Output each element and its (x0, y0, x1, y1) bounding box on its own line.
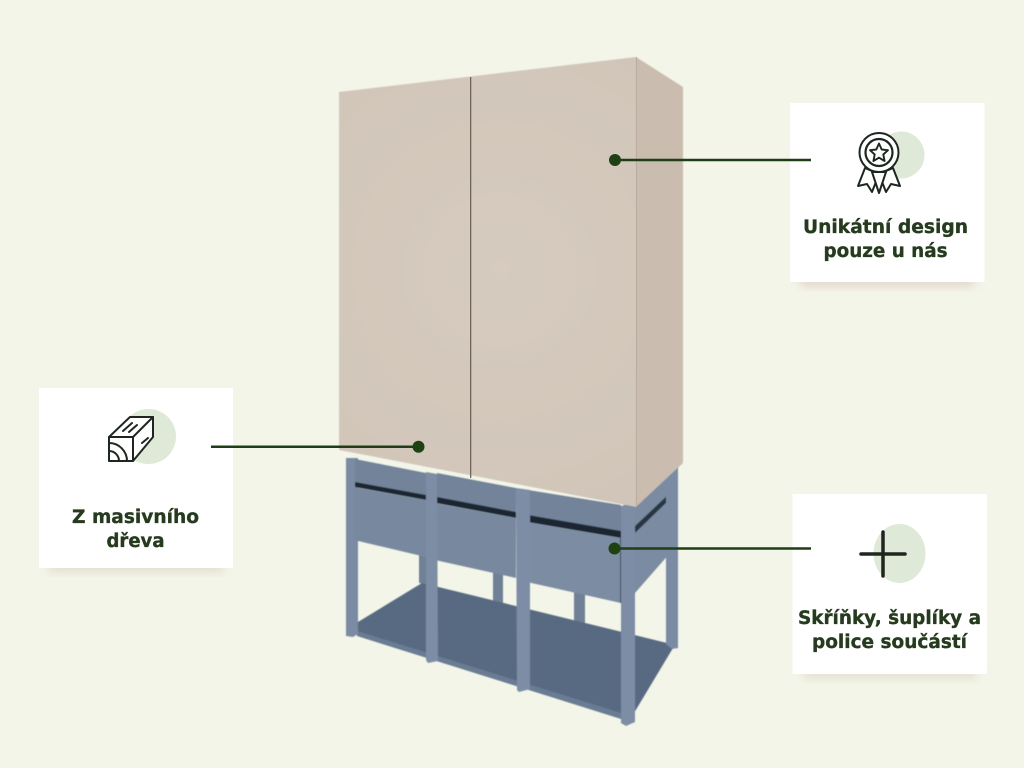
callout: wood pointer (211, 441, 424, 453)
icon: medal (858, 132, 924, 193)
left leg (346, 458, 358, 637)
card text: pouze u nás (824, 241, 948, 262)
front legs (426, 472, 635, 726)
card text: dřeva (106, 531, 164, 552)
drawer 1 (354, 459, 426, 557)
base frame with drawers and shelf (346, 458, 678, 726)
drawer 3 (527, 490, 621, 603)
card text: Skříňky, šuplíky a (798, 608, 981, 629)
card text: police součástí (812, 632, 969, 653)
card text: Unikátní design (803, 217, 968, 238)
card shadow (803, 667, 977, 678)
card text: Z masivního (72, 507, 199, 528)
card: solid wood (39, 388, 233, 572)
cabinet body (339, 57, 683, 507)
card text (72, 507, 199, 552)
icon: wood beam (109, 409, 176, 464)
drawer 2 (435, 473, 516, 578)
callout: drawer pointer (608, 542, 811, 554)
right side panel (621, 470, 670, 603)
bottom shelf (357, 583, 673, 719)
cabinet doors (339, 57, 636, 507)
card: cabinets, drawers, shelves (792, 494, 987, 678)
card text (803, 217, 968, 262)
illustration: wardrobe (339, 57, 683, 726)
card: unique design (790, 103, 984, 286)
door edge (636, 57, 638, 507)
door seam (470, 77, 472, 478)
card shadow (800, 275, 974, 286)
callout: design pointer (609, 154, 811, 166)
back legs (419, 550, 585, 624)
card shadow (48, 561, 224, 572)
cabinet side (636, 57, 683, 507)
card text (798, 608, 981, 653)
right back leg (666, 466, 678, 649)
icon: plus (861, 524, 926, 583)
